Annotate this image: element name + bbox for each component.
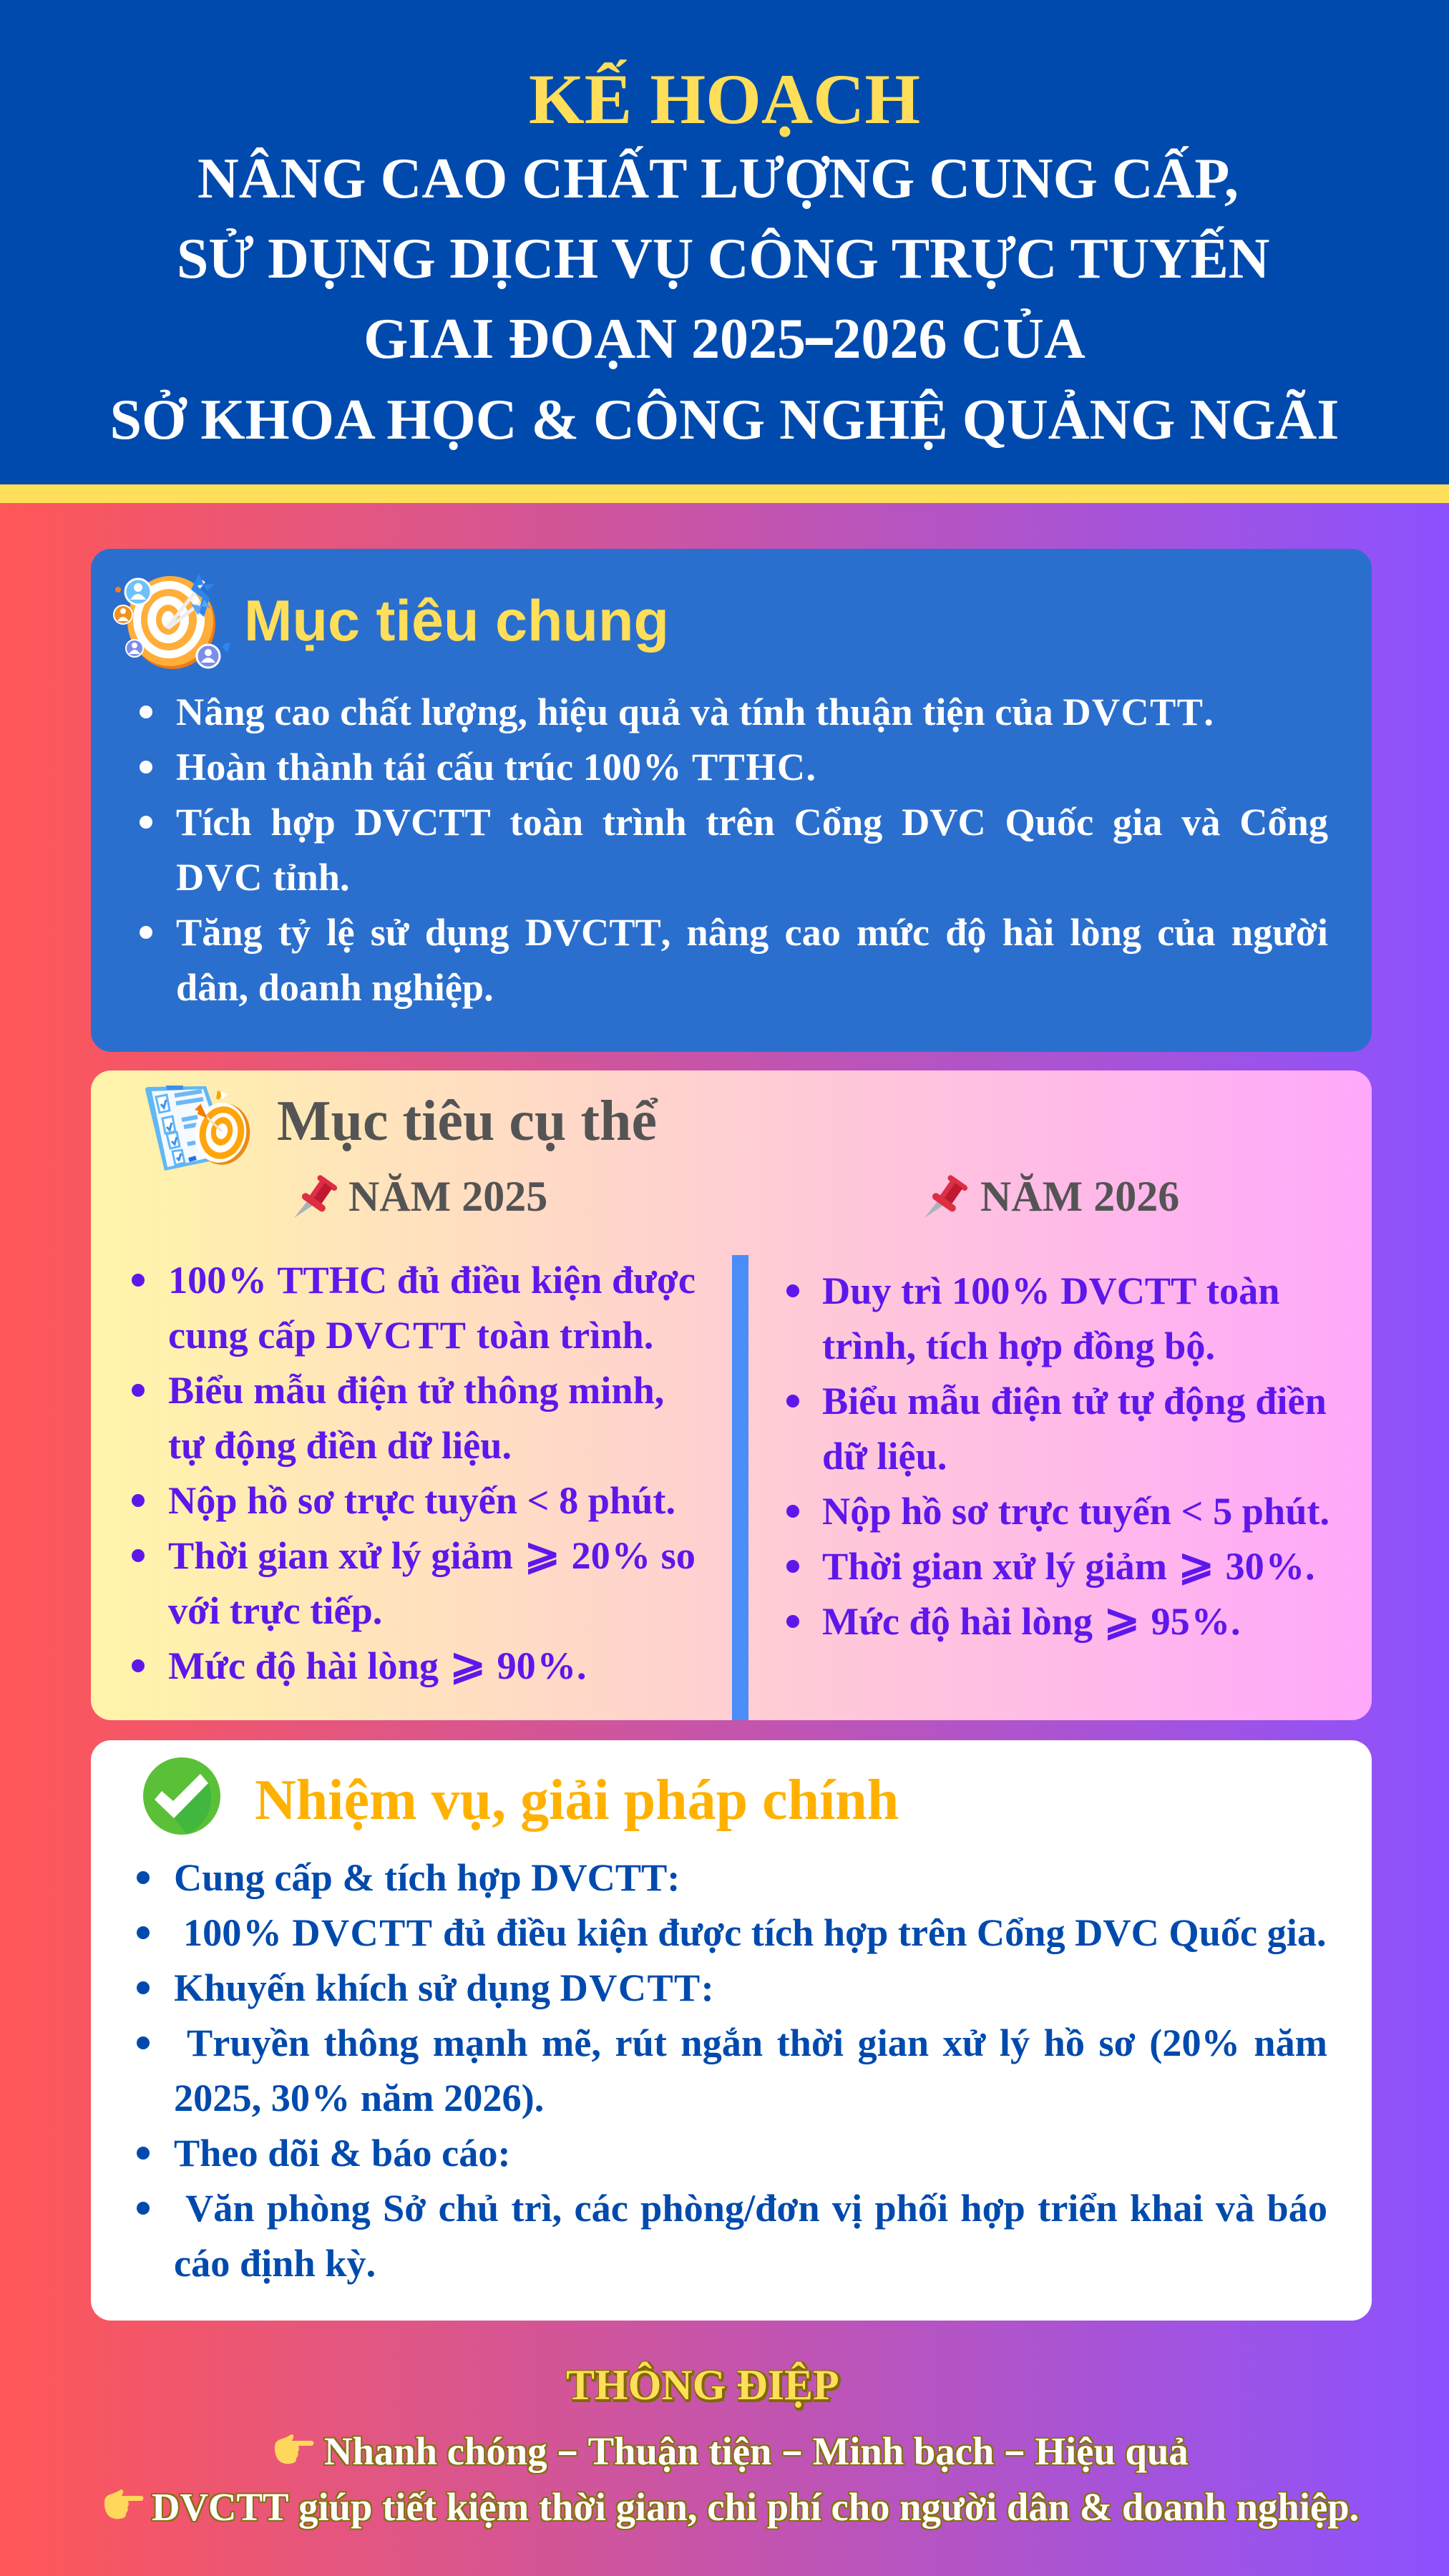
list 2026: Thời gian xử lý giảm ⩾ 30%. bbox=[822, 1541, 1315, 1589]
label 2025: NĂM 2025 bbox=[348, 1173, 547, 1220]
list 2026: Nộp hồ sơ trực tuyến < 5 phút. bbox=[822, 1490, 1330, 1533]
title line 3: GIAI ĐOẠN 2025–2026 CỦA bbox=[364, 292, 1085, 375]
icon: green check bbox=[143, 1757, 220, 1835]
tasks list: 100% DVCTT đủ điều kiện được tích hợp trên Cổng DVC Quốc gia. bbox=[183, 1911, 1327, 1954]
tasks list: 2025, 30% năm 2026). bbox=[174, 2077, 544, 2119]
list 2025: cung cấp DVCTT toàn trình. bbox=[168, 1314, 653, 1357]
list 2026: dữ liệu. bbox=[822, 1435, 947, 1478]
list 2025: Nộp hồ sơ trực tuyến < 8 phút. bbox=[168, 1479, 675, 1522]
general goals list: dân, doanh nghiệp. bbox=[176, 966, 494, 1009]
heading: thong diep: THÔNG ĐIỆP bbox=[566, 2361, 839, 2409]
title line 1: NÂNG CAO CHẤT LƯỢNG CUNG CẤP, bbox=[197, 147, 1239, 210]
tasks list: Cung cấp & tích hợp DVCTT: bbox=[174, 1856, 680, 1899]
general goals list: Tích hợp DVCTT toàn trình trên Cổng DVC Quốc gia và Cổng bbox=[176, 801, 1328, 844]
panel: nhiem vu giai phap chinh bbox=[91, 1740, 1372, 2321]
icon: pin bbox=[294, 1175, 338, 1218]
list 2025: 100% TTHC đủ điều kiện được bbox=[168, 1259, 696, 1302]
icon: clipboard with target bbox=[145, 1085, 250, 1171]
heading: muc tieu cu the: Mục tiêu cụ thể bbox=[277, 1090, 657, 1153]
heading: nhiem vu: Nhiệm vụ, giải pháp chính bbox=[255, 1769, 899, 1832]
list 2025 bbox=[132, 1259, 696, 1688]
tasks list: Khuyến khích sử dụng DVCTT: bbox=[174, 1966, 715, 2009]
list 2026: Mức độ hài lòng ⩾ 95%. bbox=[822, 1596, 1241, 1644]
general goals list: Hoàn thành tái cấu trúc 100% TTHC. bbox=[176, 746, 816, 789]
year heading 2025 bbox=[294, 1173, 547, 1220]
list 2026 bbox=[786, 1269, 1330, 1644]
message line 2 bbox=[104, 2485, 1359, 2530]
tasks list: Theo dõi & báo cáo: bbox=[174, 2132, 511, 2175]
yellow header rule bbox=[0, 484, 1449, 503]
list 2025: với trực tiếp. bbox=[168, 1589, 382, 1632]
general goals list: DVC tỉnh. bbox=[176, 856, 350, 899]
label 2026: NĂM 2026 bbox=[980, 1173, 1179, 1220]
text: Nhanh chóng – Thuận tiện – Minh bạch – Hiệu quả bbox=[324, 2419, 1189, 2476]
list 2025: Biểu mẫu điện tử thông minh, bbox=[168, 1369, 664, 1412]
tasks list: cáo định kỳ. bbox=[174, 2242, 376, 2285]
icon: pointing hand bbox=[275, 2434, 313, 2464]
vertical divider bbox=[732, 1255, 748, 1720]
list 2026: Duy trì 100% DVCTT toàn bbox=[822, 1269, 1280, 1312]
list 2025: tự động điền dữ liệu. bbox=[168, 1424, 512, 1467]
year heading 2026 bbox=[924, 1173, 1179, 1220]
general goals list: Tăng tỷ lệ sử dụng DVCTT, nâng cao mức độ hài lòng của người bbox=[176, 911, 1328, 954]
tasks list bbox=[137, 1856, 1327, 2285]
heading: muc tieu chung: Mục tiêu chung bbox=[244, 589, 669, 653]
general goals list: Nâng cao chất lượng, hiệu quả và tính thuận tiện của DVCTT. bbox=[176, 691, 1214, 733]
tasks list: Truyền thông mạnh mẽ, rút ngắn thời gian xử lý hồ sơ (20% năm bbox=[187, 2021, 1327, 2064]
header band bbox=[0, 0, 1449, 484]
list 2025: Thời gian xử lý giảm ⩾ 20% so bbox=[168, 1531, 696, 1578]
list 2026: Biểu mẫu điện tử tự động điền bbox=[822, 1380, 1327, 1423]
icon: pointing hand bbox=[104, 2489, 143, 2519]
panel: muc tieu cu the bbox=[91, 1070, 1372, 1720]
text: DVCTT giúp tiết kiệm thời gian, chi phí cho người dân & doanh nghiệp. bbox=[152, 2485, 1359, 2529]
title line 4: SỞ KHOA HỌC & CÔNG NGHỆ QUẢNG NGÃI bbox=[110, 389, 1339, 452]
icon: target with people bbox=[113, 574, 230, 669]
panel: muc tieu chung bbox=[91, 549, 1372, 1052]
list 2025: Mức độ hài lòng ⩾ 90%. bbox=[168, 1641, 587, 1688]
general goals list bbox=[140, 691, 1328, 1009]
message line 1 bbox=[275, 2419, 1189, 2476]
footer message bbox=[104, 2361, 1359, 2530]
list 2026: trình, tích hợp đồng bộ. bbox=[822, 1324, 1215, 1367]
title: ke hoach: KẾ HOẠCH bbox=[529, 59, 920, 139]
icon: pin bbox=[924, 1175, 967, 1218]
tasks list: Văn phòng Sở chủ trì, các phòng/đơn vị phối hợp triển khai và báo bbox=[185, 2187, 1327, 2230]
title line 2: SỬ DỤNG DỊCH VỤ CÔNG TRỰC TUYẾN bbox=[177, 228, 1269, 291]
